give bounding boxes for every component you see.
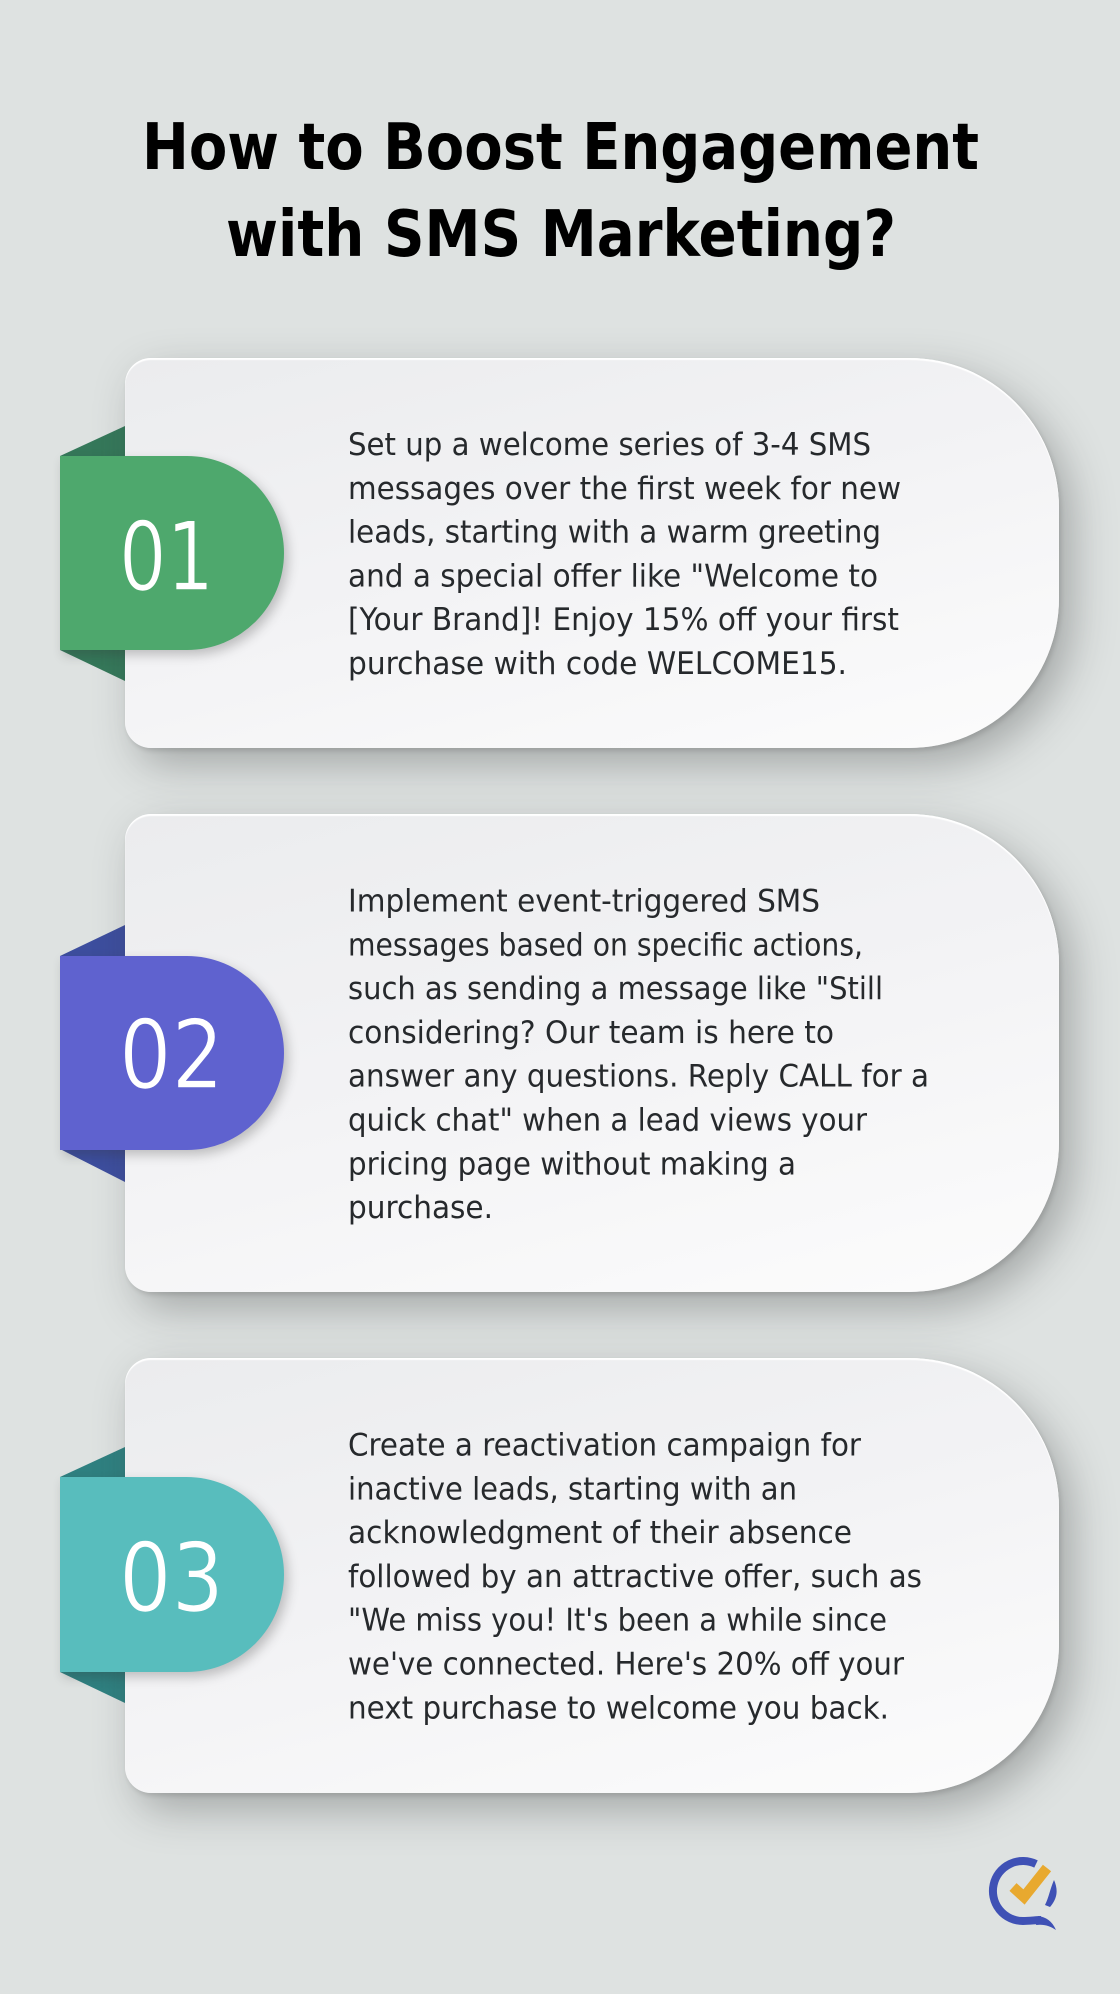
ribbon folds: step 02 [60,925,125,1182]
ribbon folds: step 03 [60,1447,125,1703]
number and text: step 02: Implement event-triggered SMS [348,884,820,920]
number and text: step 03: inactive leads, starting with an [348,1471,797,1507]
card: step 02 [124,814,1059,1292]
title: How to Boost Engagement [142,111,979,185]
number and text: step 02: such as sending a message like "Still [348,971,883,1007]
number and text: step 01: Set up a welcome series of 3-4 SMS [348,427,871,463]
number and text: step 02: purchase. [348,1190,493,1226]
number and text: step 01: 01 [119,503,214,613]
number and text: step 01 [119,427,901,682]
badge: 01 [60,456,284,650]
number and text: step 02: answer any questions. Reply CALL for a [348,1059,929,1095]
panel: step 03 reactivation campaign [59,1351,1095,1832]
number and text: step 01: messages over the first week for new [348,471,901,507]
title: with SMS Marketing? [226,198,896,272]
number and text: step 02: messages based on specific actions, [348,927,863,963]
card: step 03 [124,1358,1059,1793]
badge: 02 [60,956,284,1150]
number and text: step 03 [119,1428,922,1726]
number and text: step 03: Create a reactivation campaign for [348,1428,861,1464]
number and text: step 03: we've connected. Here's 20% off your [348,1646,904,1682]
ribbon folds: step 01 [60,426,125,681]
number and text: step 03: "We miss you! It's been a while since [348,1603,887,1639]
number and text: step 02: considering? Our team is here to [348,1015,834,1051]
panel: step 02 event-triggered messages [59,807,1095,1331]
badge: 03 [60,1477,284,1672]
title [142,111,979,272]
number and text: step 03: acknowledgment of their absence [348,1515,852,1551]
number and text: step 03: next purchase to welcome you back. [348,1690,889,1726]
icon: logo chat bubble with check mark [988,1857,1057,1930]
number and text: step 02: 02 [119,1001,224,1111]
panel: step 01 welcome series [59,351,1095,787]
number and text: step 01: and a special offer like "Welcome to [348,558,878,594]
number and text: step 01: leads, starting with a warm greeting [348,515,881,551]
number and text: step 01: [Your Brand]! Enjoy 15% off your first [348,602,899,638]
number and text: step 02 [119,884,929,1226]
number and text: step 03: followed by an attractive offer, such as [348,1559,922,1595]
number and text: step 02: pricing page without making a [348,1146,796,1182]
number and text: step 02: quick chat" when a lead views your [348,1102,867,1138]
card: step 01 [124,358,1059,748]
number and text: step 01: purchase with code WELCOME15. [348,646,847,682]
number and text: step 03: 03 [119,1524,224,1634]
